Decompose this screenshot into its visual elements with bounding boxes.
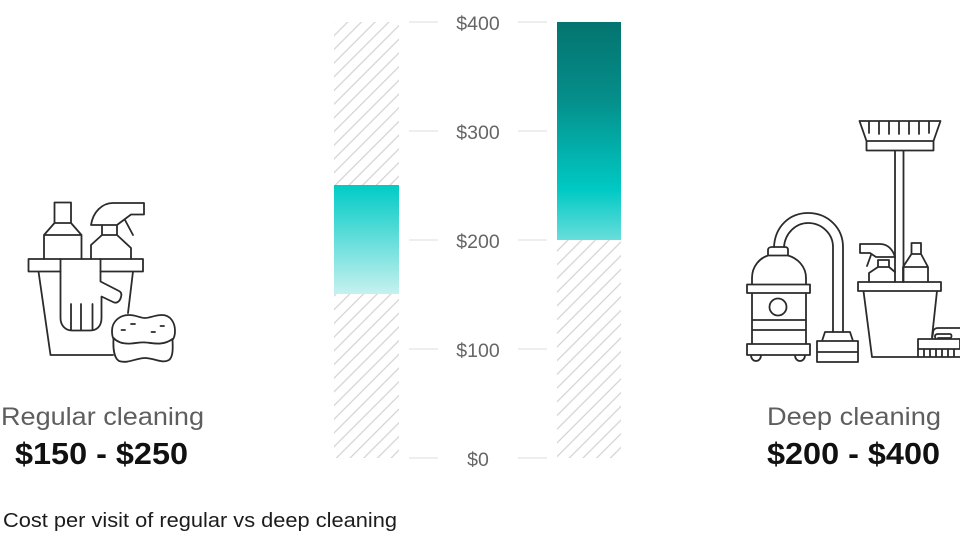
price: regular cleaning: $150 - $250 <box>15 436 188 471</box>
price: deep cleaning: $200 - $400 <box>767 436 940 471</box>
sponge <box>112 315 175 362</box>
icon: bucket with bottle, spray, glove and sponge <box>28 202 175 362</box>
caption: Cost per visit of regular vs deep cleaning <box>3 510 397 532</box>
glove <box>60 259 121 330</box>
right column background <box>557 22 621 458</box>
bottle <box>44 202 82 259</box>
axis: ticks and values: $400 <box>456 13 500 35</box>
chart: price ranges <box>334 13 621 471</box>
broom <box>860 121 940 282</box>
axis: ticks and values: $0 <box>467 449 489 471</box>
right range bar 200-400 <box>557 22 621 240</box>
icon: vacuum, broom, bucket and brush <box>747 121 960 362</box>
axis: ticks and values: $200 <box>456 231 500 253</box>
axis: ticks and values: $100 <box>456 340 500 362</box>
bottle <box>903 243 928 282</box>
bucket <box>858 282 941 357</box>
vacuum body <box>747 247 810 361</box>
left column background <box>334 22 399 458</box>
bucket <box>28 259 143 355</box>
axis: ticks and values <box>409 13 547 471</box>
axis: ticks and values: $300 <box>456 122 500 144</box>
vacuum nozzle <box>817 332 858 362</box>
label: regular cleaning: Regular cleaning <box>1 403 204 431</box>
spray bottle <box>860 244 895 282</box>
small brush <box>918 328 960 357</box>
label: deep cleaning: Deep cleaning <box>767 403 941 431</box>
left range bar 150-250 <box>334 185 399 294</box>
spray bottle <box>91 203 144 259</box>
vacuum hose <box>774 213 843 332</box>
